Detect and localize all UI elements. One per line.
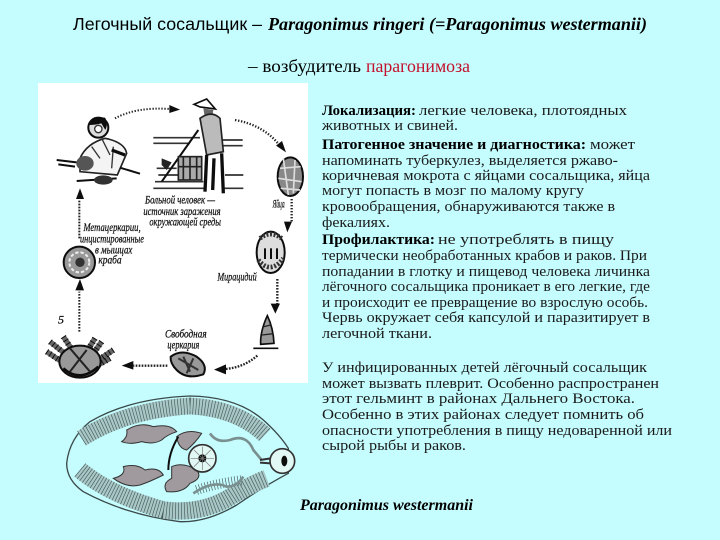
text block: children and regions: сырой рыбы и раков. <box>322 438 466 454</box>
caption: miracidium: Мирацидий <box>217 270 257 284</box>
icon: man eating at table <box>57 117 140 185</box>
text block: children and regions: У инфицированных детей лёгочный сосальщик <box>322 360 648 376</box>
caption: sick person <box>143 193 221 229</box>
label: number 5: 5 <box>58 313 64 327</box>
icon: crab <box>47 337 113 378</box>
text block: pathogenic significance and diagnosis: напоминать туберкулез, выделяется ржаво- <box>322 153 618 169</box>
panel: life cycle diagram: Яйца <box>272 197 285 211</box>
caption: metacercariae: в мышцах <box>95 242 133 256</box>
text block: pathogenic significance and diagnosis: коричневая мокрота с яйцами сосальщика, яйца <box>322 168 651 184</box>
text block: localization: Локализация: <box>322 103 416 119</box>
text block: pathogenic significance and diagnosis: кровообращения, обнаруживаются также в <box>322 199 615 215</box>
caption: free cercaria: церкария <box>167 337 200 351</box>
icon: cercaria <box>171 352 205 376</box>
icon: man with hoe in field <box>153 99 243 193</box>
text block: children and regions: может вызвать плеврит. Особенно распространен <box>322 376 659 392</box>
gut branches <box>193 433 262 493</box>
text block: localization: легкие человека, плотоядных <box>419 103 628 119</box>
icon: miracidium <box>257 232 285 273</box>
text block: children and regions: Особенно в этих районах следует помнить об <box>322 407 644 423</box>
text block: pathogenic significance and diagnosis: фекалиях. <box>322 215 390 231</box>
caption: free cercaria <box>165 326 207 351</box>
caption: metacercariae: инцистированные <box>80 231 144 245</box>
arrow: man to field <box>115 105 180 118</box>
caption: metacercariae: Метацеркарии, <box>83 220 141 234</box>
text block: prevention: и происходит ее превращение во взрослую особь. <box>322 295 648 311</box>
vitelline glands <box>80 406 267 511</box>
text block: prevention: попадании в глотку и пищевод человека личинка <box>322 264 650 280</box>
caption: metacercariae: краба <box>98 253 122 267</box>
text block: localization <box>321 103 628 134</box>
illustration: Paragonimus westermanii fluke <box>67 396 295 522</box>
title: Paragonimus ringeri (=Paragonimus westermanii) <box>267 14 647 34</box>
caption: sick person: источник заражения <box>143 204 221 218</box>
subtitle: парагонимоза <box>366 56 470 76</box>
oral sucker <box>260 449 295 473</box>
text block: prevention: термически необработанных крабов и раков. При <box>322 248 647 264</box>
text block: pathogenic significance and diagnosis: могут попасть в мозг по малому кругу <box>322 183 585 199</box>
caption: free cercaria: Свободная <box>165 326 207 340</box>
fluke body outline <box>67 396 288 522</box>
arrow: miracidium to snail <box>271 279 280 314</box>
arrow: snail to cercaria <box>214 356 257 374</box>
oesophagus stroke <box>168 437 178 470</box>
text block: prevention: легочной ткани. <box>322 326 432 342</box>
icon: metacercaria <box>64 247 95 278</box>
caption: sick person: Больной человек — <box>144 193 215 207</box>
text block: children and regions: этот гельминт в районах Дальнего Востока. <box>322 391 635 407</box>
text block: pathogenic significance and diagnosis: может <box>590 137 636 153</box>
title: Легочный сосальщик – <box>73 14 262 34</box>
text block: prevention: не употреблять в пищу <box>438 232 615 248</box>
text block: prevention: Червь окружает себя капсулой и паразитирует в <box>322 310 650 326</box>
icon: snail <box>253 316 278 348</box>
arrow: egg to miracidium <box>284 199 292 232</box>
text block: children and regions <box>322 360 672 454</box>
text block: prevention <box>322 232 650 342</box>
arrow: field to egg <box>235 120 286 152</box>
ovary and testes <box>113 425 202 492</box>
subtitle: – возбудитель <box>247 56 361 76</box>
arrow: crab to metacercaria <box>75 279 84 332</box>
text block: pathogenic significance and diagnosis <box>322 137 651 231</box>
text block: prevention: лёгочного сосальщика проникает в его легкие, где <box>322 279 650 295</box>
caption: sick person: окружающей среды <box>149 215 221 229</box>
arrow: metacercaria to man <box>76 188 84 238</box>
caption: metacercariae <box>80 220 144 267</box>
ventral sucker <box>189 445 216 472</box>
arrow: cercaria to crab <box>122 361 167 370</box>
text block: localization: животных и свиней. <box>321 118 458 134</box>
subtitle <box>247 56 470 76</box>
title <box>73 14 647 34</box>
text block: children and regions: опасности употребления в пищу недоваренной или <box>322 423 672 439</box>
icon: egg <box>278 157 303 196</box>
caption: species name: Paragonimus westermanii <box>299 497 474 514</box>
text block: prevention: Профилактика: <box>322 232 435 248</box>
text block: pathogenic significance and diagnosis: Патогенное значение и диагностика: <box>322 137 586 153</box>
panel: life cycle diagram <box>38 83 308 383</box>
